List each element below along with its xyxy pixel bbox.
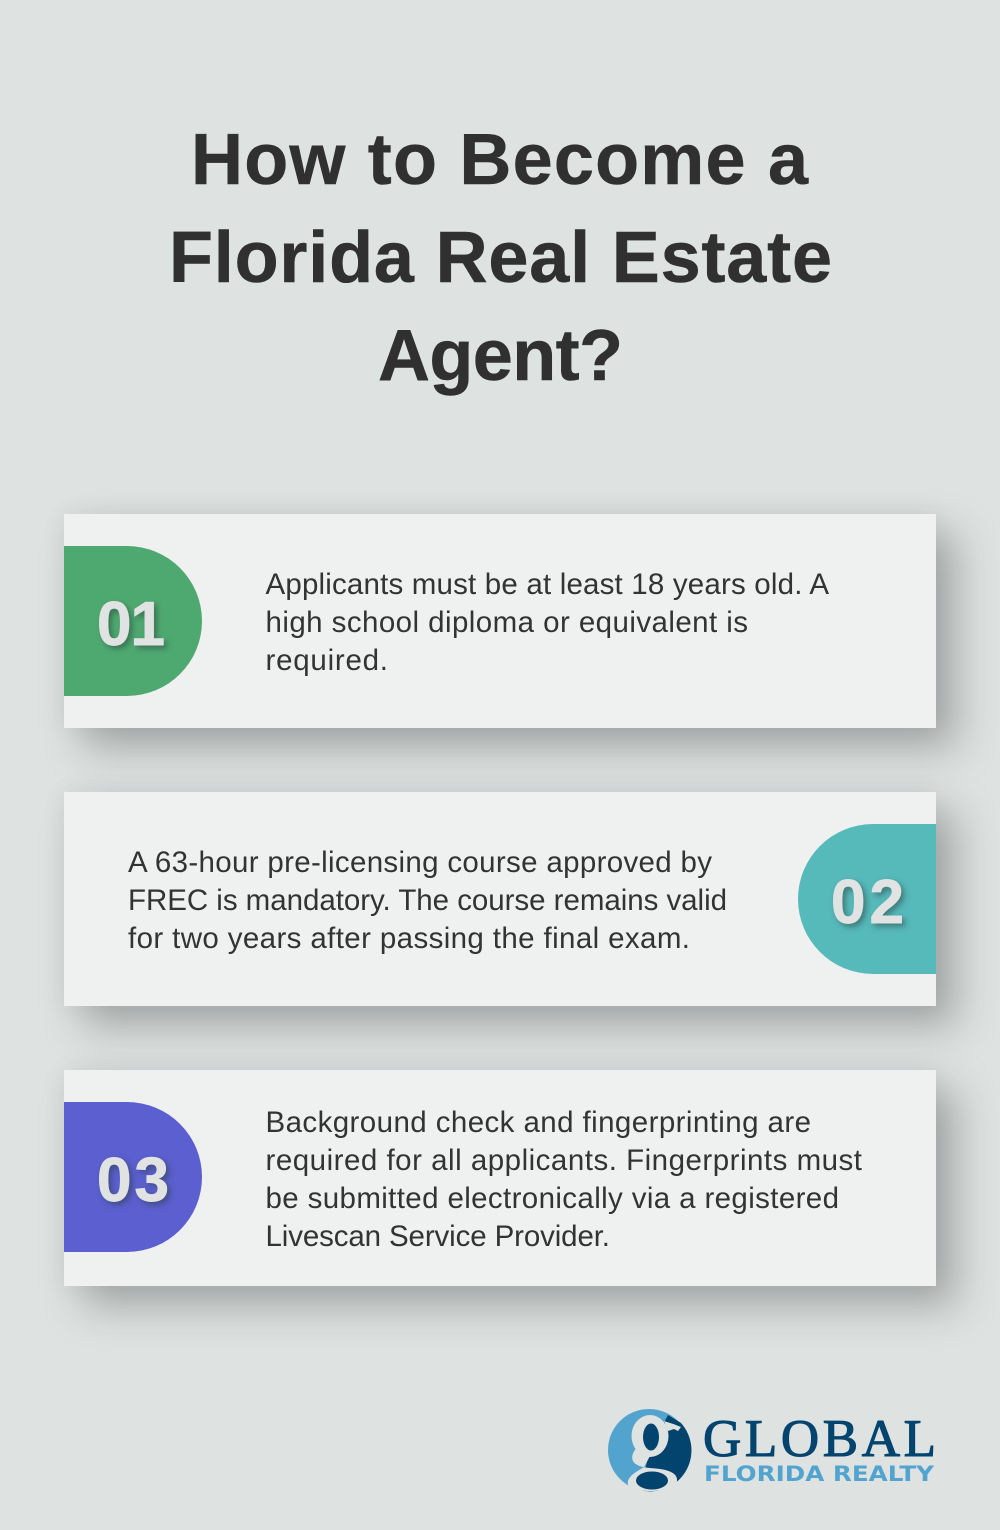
step 3 text: Livescan Service Provider. bbox=[266, 1220, 610, 1253]
step 2 number badge: 02 bbox=[831, 868, 904, 937]
step 2 text: A 63-hour pre-licensing course approved by bbox=[128, 846, 712, 879]
step 1 text bbox=[266, 568, 829, 677]
step 1 number badge: 01 bbox=[97, 590, 165, 659]
step 1 text: high school diploma or equivalent is bbox=[266, 606, 748, 639]
step 3 text: Background check and fingerprinting are bbox=[266, 1106, 811, 1139]
panel: step 2 card bbox=[64, 792, 936, 1006]
title bbox=[169, 120, 832, 396]
step 1 text: required. bbox=[266, 644, 388, 677]
wordmark: GLOBAL: GLOBAL bbox=[703, 1410, 936, 1468]
logo: Global Florida Realty bbox=[608, 1409, 936, 1491]
step 2 text: FREC is mandatory. The course remains valid bbox=[128, 884, 727, 917]
title: How to Become a bbox=[191, 120, 809, 200]
title: Florida Real Estate bbox=[169, 218, 832, 298]
icon: g monogram circle bbox=[608, 1409, 691, 1491]
step 3 number badge bbox=[64, 1102, 202, 1252]
step 2 text: for two years after passing the final exam. bbox=[128, 922, 690, 955]
step 3 text: be submitted electronically via a registered bbox=[266, 1182, 839, 1215]
panel: step 1 card bbox=[64, 514, 936, 728]
step 1 number badge bbox=[64, 546, 202, 696]
step 2 text bbox=[128, 846, 727, 955]
step 3 text: required for all applicants. Fingerprints must bbox=[266, 1144, 862, 1177]
panel: step 3 card bbox=[64, 1070, 936, 1286]
step 2 number badge bbox=[798, 824, 936, 974]
title: Agent? bbox=[378, 316, 623, 396]
step 3 text bbox=[266, 1106, 862, 1253]
wordmark: FLORIDA REALTY: FLORIDA REALTY bbox=[704, 1462, 935, 1486]
step 3 number badge: 03 bbox=[97, 1146, 169, 1215]
step 1 text: Applicants must be at least 18 years old. A bbox=[266, 568, 829, 601]
